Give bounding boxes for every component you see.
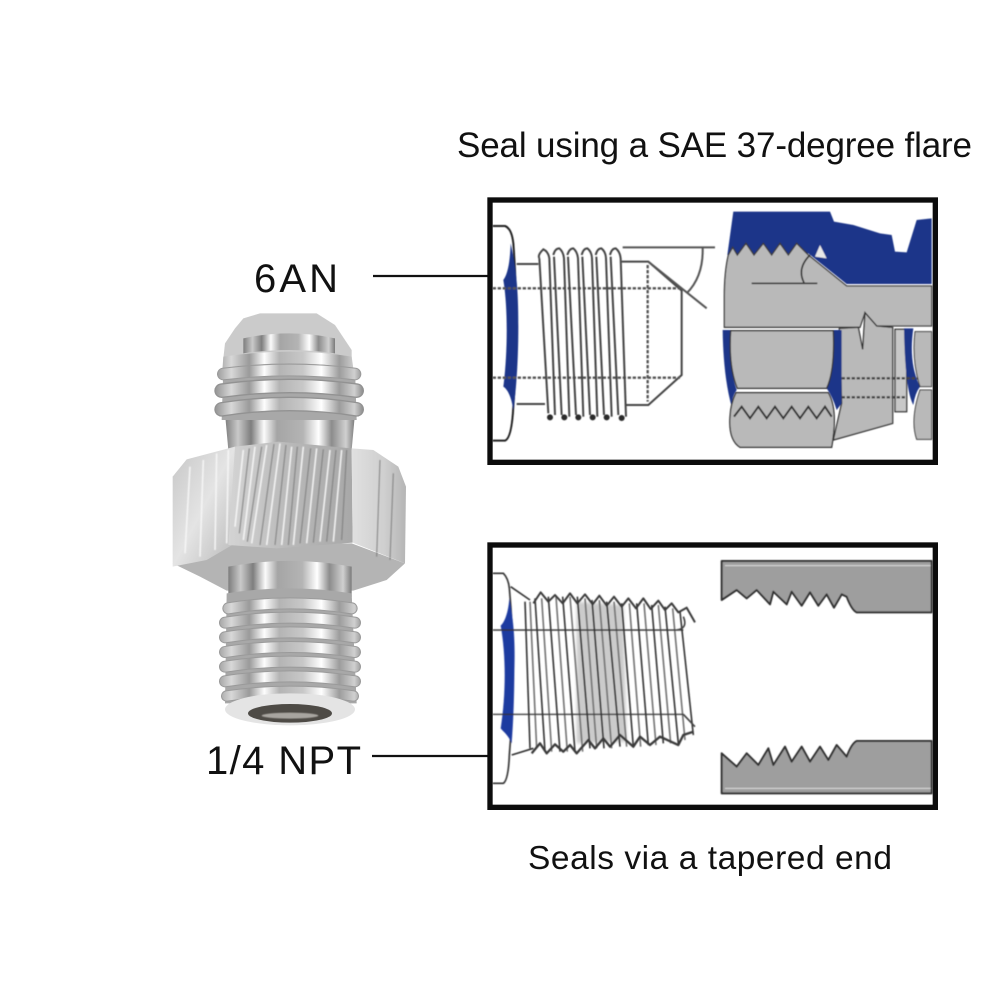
tube extension <box>833 313 893 440</box>
highlight lines <box>725 566 931 788</box>
nut internal thread <box>734 407 832 418</box>
blue nut crescents <box>723 328 920 410</box>
hex centre facet <box>228 442 353 548</box>
nut upper face <box>730 331 834 388</box>
female thread section <box>722 561 932 793</box>
hex outline <box>493 573 513 783</box>
tube dashed lines <box>842 378 932 397</box>
blue chamfer <box>503 243 518 410</box>
caption: tapered seal: Seals via a tapered end <box>528 840 892 877</box>
top profile <box>533 592 695 622</box>
shoulder <box>511 587 533 755</box>
white thread relief <box>815 245 827 258</box>
tube extension right <box>895 329 907 412</box>
angle marks <box>623 247 715 308</box>
lower neck <box>228 561 352 597</box>
flare tip <box>222 313 355 380</box>
label: 1/4 NPT: 1/4 NPT <box>206 739 361 783</box>
bore end face <box>225 693 355 725</box>
heading: flare seal: Seal using a SAE 37-degree flare <box>457 126 972 165</box>
female swivel drawing <box>723 212 932 447</box>
hex left facet <box>173 447 235 567</box>
female tapered thread top <box>722 561 932 612</box>
male tapered thread drawing <box>493 573 695 783</box>
threads <box>539 248 626 417</box>
blue chamfer <box>501 598 515 743</box>
upper threads <box>222 363 357 420</box>
leader line: 6AN <box>373 275 489 277</box>
brushed machining marks <box>185 443 342 557</box>
panel: flare fitting diagram <box>490 200 935 462</box>
leader line: 1/4 NPT <box>372 755 490 757</box>
grey tube body <box>724 243 932 327</box>
thread roots <box>547 414 625 421</box>
body lines <box>517 262 682 405</box>
fitting photo: 6AN to 1/4 NPT adapter <box>173 313 406 725</box>
label: 6AN: 6AN <box>254 257 338 301</box>
thread shading <box>577 602 627 743</box>
thread crest lines <box>525 592 695 753</box>
hex right facet <box>352 448 406 563</box>
blue nut section <box>727 212 932 284</box>
lower hex underside <box>173 543 405 591</box>
upper neck <box>225 413 355 450</box>
right hex <box>914 332 932 439</box>
hex outline <box>493 226 516 441</box>
female tapered thread bottom <box>722 741 932 793</box>
male flare fitting drawing <box>493 226 715 441</box>
bottom profile <box>532 732 693 753</box>
lower threads <box>225 588 357 703</box>
panel: tapered NPT diagram <box>490 545 935 807</box>
centre lines <box>493 630 683 714</box>
nut lower face <box>730 393 834 447</box>
seat angle mark <box>752 255 817 283</box>
